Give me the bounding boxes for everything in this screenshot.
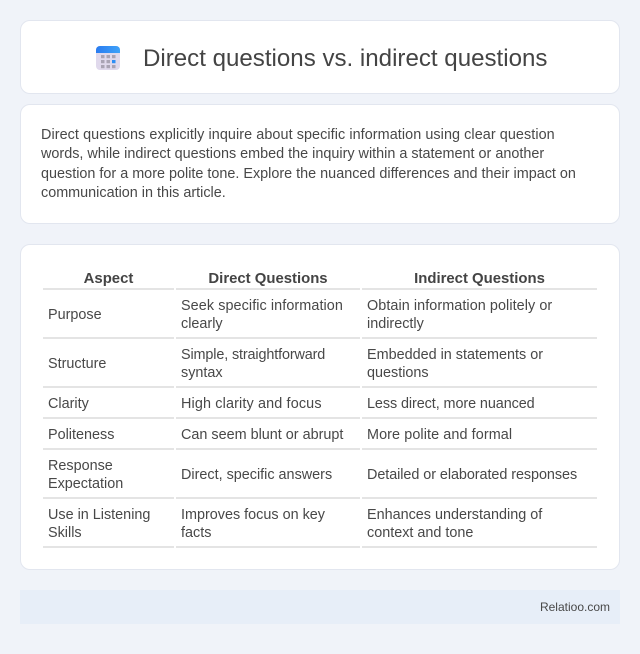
title: Direct questions vs. indirect questions xyxy=(143,45,547,72)
row: Structure direct: Simple, straightforward xyxy=(181,347,325,363)
row: Clarity aspect: Clarity xyxy=(48,396,89,412)
row: Purpose aspect: Purpose xyxy=(48,307,102,323)
text block: description: words, while indirect questions embed the inquiry within a statement or another xyxy=(41,146,544,162)
row: Use in Listening Skills direct: Improves focus on key xyxy=(181,507,325,523)
text block: description: communication in this article. xyxy=(41,185,226,201)
row: Response Expectation aspect: Response xyxy=(48,458,113,474)
row: Response Expectation aspect: Expectation xyxy=(48,476,123,492)
text block: description: Direct questions explicitly inquire about specific information using clear question xyxy=(41,127,555,143)
row: Use in Listening Skills indirect: context and tone xyxy=(367,525,473,541)
table header: Direct Questions: Direct Questions xyxy=(208,271,328,287)
footer bar xyxy=(20,590,620,624)
table header: Aspect: Aspect xyxy=(84,271,133,287)
row: Response Expectation aspect xyxy=(48,458,123,492)
row: Structure direct xyxy=(181,347,325,381)
row: Use in Listening Skills direct: facts xyxy=(181,525,211,541)
row: Use in Listening Skills aspect: Use in Listening xyxy=(48,507,150,523)
row: Response Expectation direct: Direct, specific answers xyxy=(181,467,332,483)
row: Purpose direct: clearly xyxy=(181,316,223,332)
row: Use in Listening Skills direct xyxy=(181,507,325,541)
panel: comparison table xyxy=(20,244,620,570)
row: Politeness direct: Can seem blunt or abrupt xyxy=(181,427,343,443)
row: Use in Listening Skills indirect xyxy=(367,507,542,541)
text block: description: question for a more polite tone. Explore the nuanced differences and their impact on xyxy=(41,166,576,182)
row: Structure indirect: questions xyxy=(367,365,429,381)
row: Use in Listening Skills indirect: Enhances understanding of xyxy=(367,507,542,523)
row: Use in Listening Skills aspect xyxy=(48,507,150,541)
row: Purpose indirect: indirectly xyxy=(367,316,424,332)
row: Structure indirect xyxy=(367,347,543,381)
row: Purpose indirect xyxy=(367,298,552,332)
row: Use in Listening Skills aspect: Skills xyxy=(48,525,82,541)
panel: header xyxy=(20,20,620,94)
row: Purpose direct: Seek specific information xyxy=(181,298,343,314)
row: Structure indirect: Embedded in statements or xyxy=(367,347,543,363)
row: Structure direct: syntax xyxy=(181,365,223,381)
row: Politeness aspect: Politeness xyxy=(48,427,114,443)
row: Structure aspect: Structure xyxy=(48,356,106,372)
row: Clarity direct: High clarity and focus xyxy=(181,396,322,412)
row: Purpose direct xyxy=(181,298,343,332)
panel: description xyxy=(20,104,620,224)
row: Purpose indirect: Obtain information politely or xyxy=(367,298,552,314)
row: Politeness indirect: More polite and formal xyxy=(367,427,512,443)
footer text: Relatioo.com xyxy=(540,600,610,614)
icon: calendar xyxy=(96,46,120,70)
row: Response Expectation indirect: Detailed or elaborated responses xyxy=(367,467,577,483)
text block: description xyxy=(41,127,576,201)
table header: Indirect Questions: Indirect Questions xyxy=(414,271,545,287)
row: Clarity indirect: Less direct, more nuanced xyxy=(367,396,535,412)
